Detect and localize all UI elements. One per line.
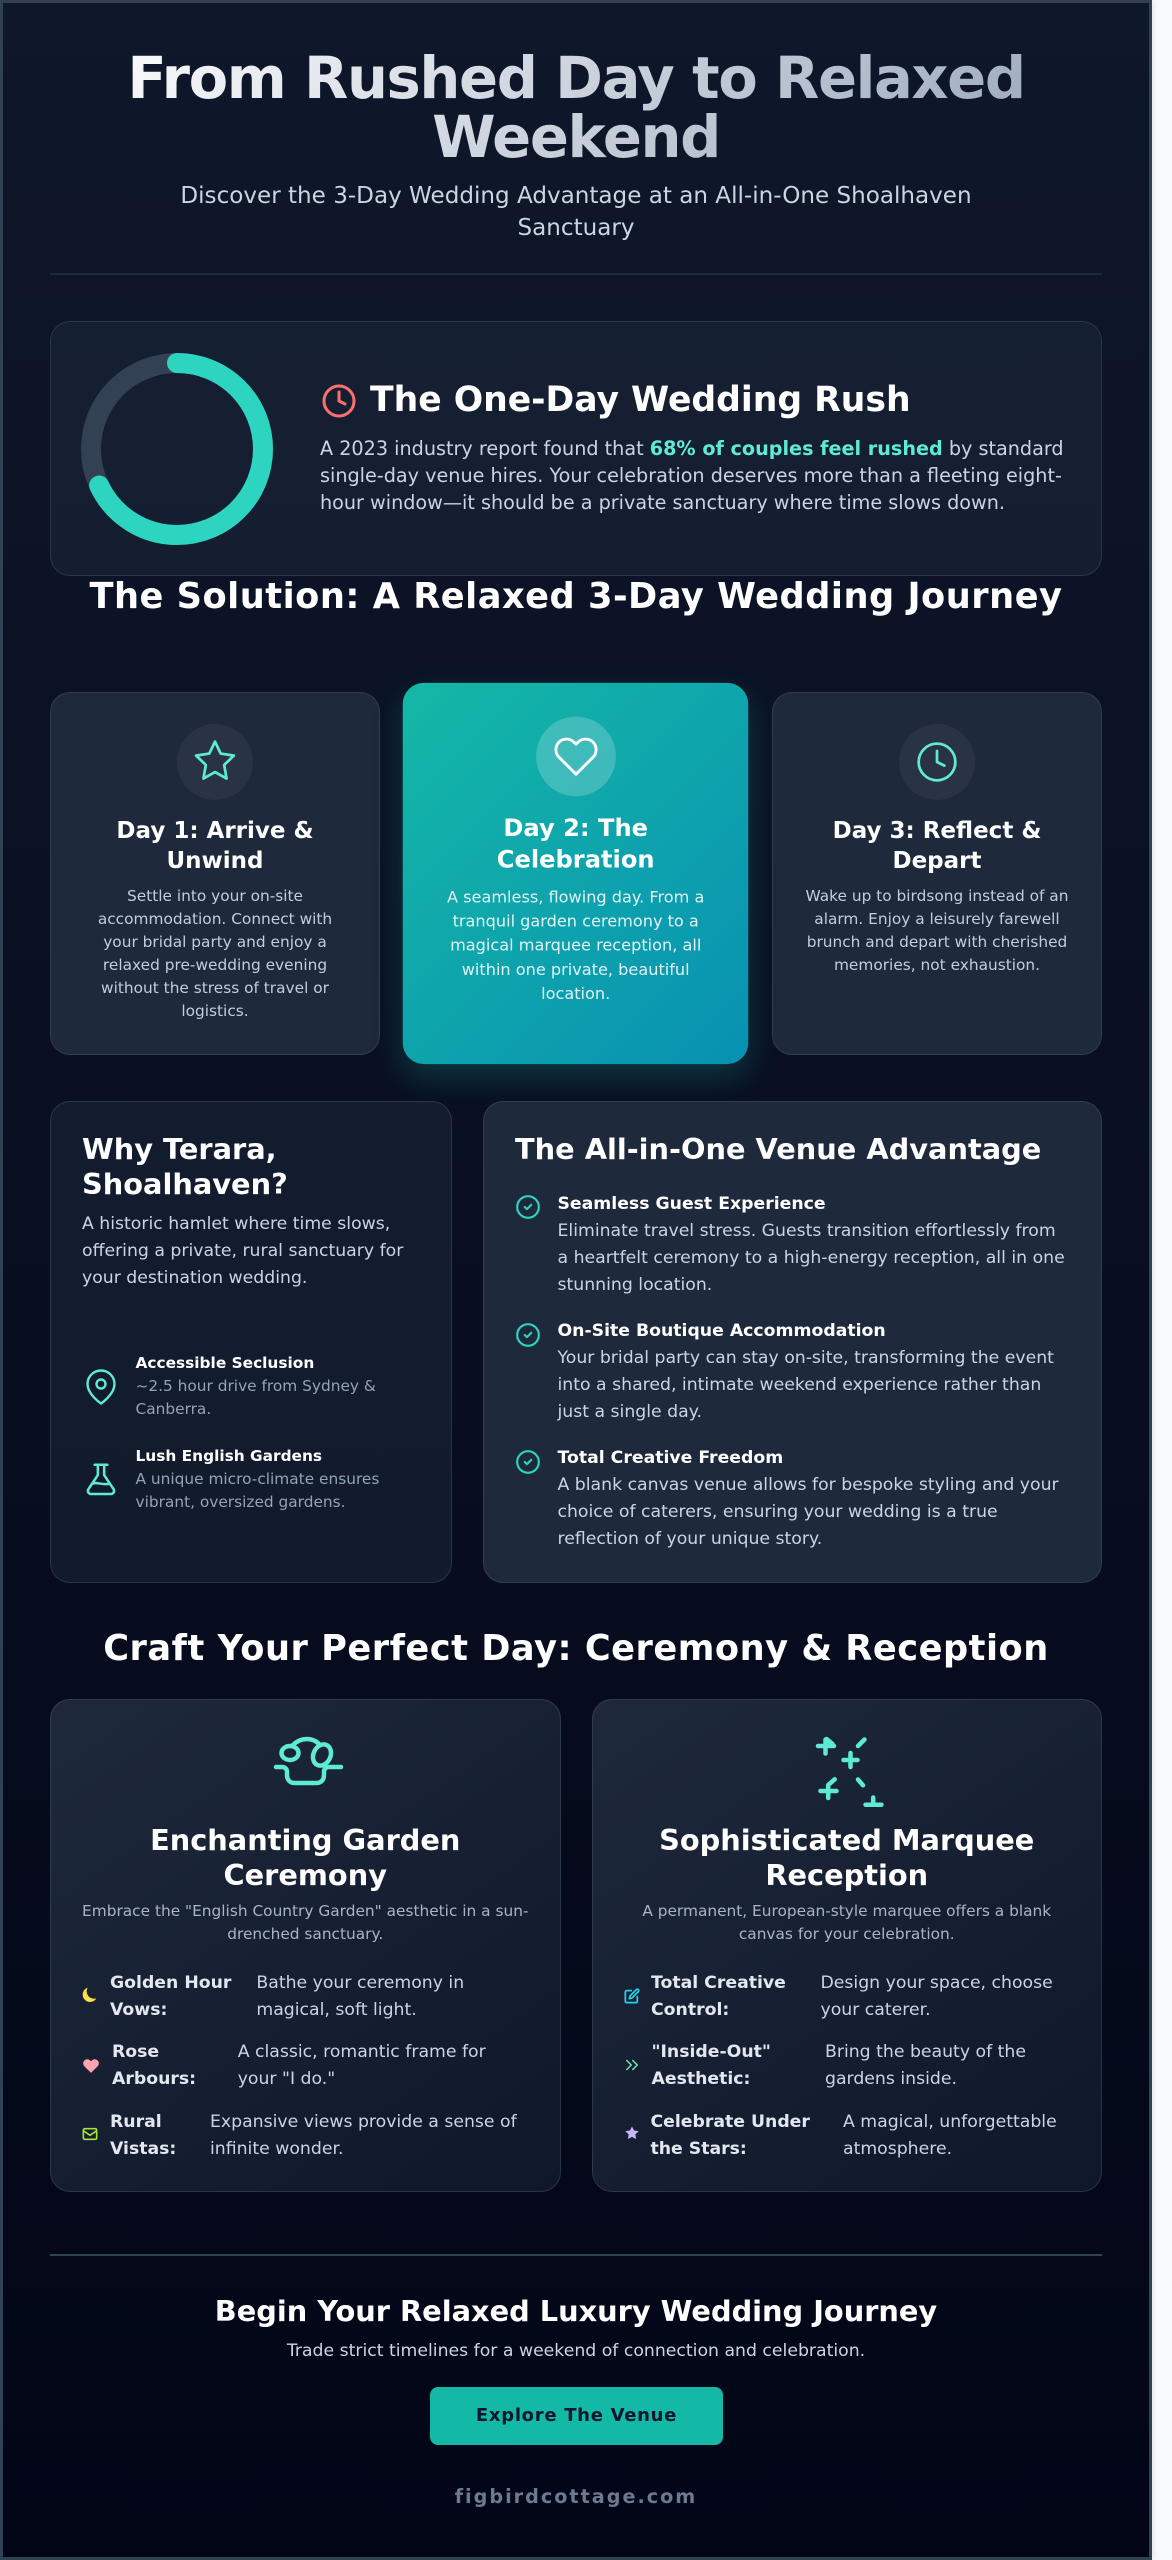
item: total creative freedom: A blank canvas venue allows for bespoke styling and your	[558, 1475, 1059, 1495]
text: day 3: memories, not exhaustion.	[834, 956, 1040, 974]
panel: garden ceremony: your "I do."	[238, 2069, 335, 2089]
title: Weekend	[432, 104, 720, 170]
heading: day 1	[116, 818, 314, 874]
heading: sophisticated marquee reception: Sophisticated Marquee	[659, 1822, 1034, 1856]
text: day 1: relaxed pre-wedding evening	[103, 956, 327, 974]
panel: garden ceremony: Golden Hour	[110, 1973, 231, 1993]
text: day 1	[98, 886, 332, 1020]
text: day 2: A seamless, flowing day. From a	[447, 887, 705, 906]
panel: marquee reception	[592, 1699, 1102, 2192]
item: seamless guest experience: stunning location.	[558, 1275, 712, 1295]
icon: clock	[899, 724, 975, 800]
text: why terara intro: offering a private, rural sanctuary for	[82, 1240, 403, 1260]
text: day 2: tranquil garden ceremony to a	[453, 911, 699, 930]
text: day 3: Wake up to birdsong instead of an	[806, 886, 1068, 904]
icon: moon	[82, 1988, 96, 2002]
text: day 2	[447, 887, 705, 1003]
panel: garden ceremony: infinite wonder.	[210, 2139, 343, 2159]
item: lush english gardens	[136, 1446, 379, 1510]
item: total creative freedom: reflection of your unique story.	[558, 1529, 822, 1549]
subtitle: Sanctuary	[518, 214, 634, 240]
item: on-site boutique accommodation	[557, 1321, 1054, 1422]
icon: check 2	[516, 1323, 540, 1347]
text: rush statistic: A 2023 industry report found that 68% of couples feel rushed by standard	[320, 437, 1064, 460]
item: lush english gardens: vibrant, oversized gardens.	[136, 1492, 346, 1510]
item: rose arbours	[112, 2042, 486, 2089]
heading: venue advantage: The All-in-One Venue Advantage	[515, 1132, 1041, 1166]
text: day 1: without the stress of travel or	[101, 979, 329, 997]
panel: day 3	[772, 692, 1102, 1055]
panel: marquee reception: Aesthetic:	[652, 2069, 750, 2089]
item: accessible seclusion: ~2.5 hour drive from Sydney &	[136, 1376, 376, 1394]
item: seamless guest experience: Seamless Guest Experience	[558, 1194, 826, 1214]
item: celebrate under the stars	[650, 2112, 1057, 2159]
text: marquee intro	[642, 1902, 1051, 1942]
icon: sparkles	[816, 1736, 884, 1807]
icon: edit	[624, 1988, 640, 2004]
text: day 1: your bridal party and enjoy a	[103, 933, 327, 951]
heading: craft your perfect day: Craft Your Perfect Day: Ceremony & Reception	[103, 1628, 1049, 1669]
item: total creative control	[651, 1973, 1053, 2020]
text: day 3: brunch and depart with cherished	[807, 933, 1067, 951]
text: day 1: Settle into your on-site	[127, 886, 303, 904]
heading: why terara	[82, 1132, 288, 1200]
subtitle	[180, 183, 972, 240]
text: day 3: alarm. Enjoy a leisurely farewell	[814, 910, 1060, 928]
footer heading: Begin Your Relaxed Luxury Wedding Journey	[215, 2294, 937, 2328]
icon: check 1	[516, 1195, 540, 1219]
text: why terara intro: A historic hamlet where time slows,	[82, 1214, 390, 1234]
text: day 1: logistics.	[181, 1002, 249, 1020]
panel: garden ceremony: Expansive views provide a sense of	[210, 2112, 517, 2132]
heading: day 1: Unwind	[166, 848, 264, 874]
icon: mail	[82, 2128, 98, 2140]
text: marquee intro: A permanent, European-style marquee offers a blank	[642, 1902, 1051, 1920]
item: total creative freedom: Total Creative Freedom	[558, 1448, 783, 1468]
item: total creative freedom: choice of caterers, ensuring your wedding is a true	[558, 1502, 998, 1522]
subtitle: Discover the 3-Day Wedding Advantage at an All-in-One Shoalhaven	[180, 183, 972, 209]
heading: why terara: Why Terara,	[82, 1132, 277, 1166]
button	[430, 2387, 723, 2445]
icon: check 3	[516, 1450, 540, 1474]
item: accessible seclusion	[136, 1354, 376, 1418]
heading: day 2: Celebration	[497, 846, 655, 873]
icon: garden sofa	[274, 1736, 344, 1786]
panel: marquee reception: "Inside-Out"	[652, 2042, 771, 2062]
panel: marquee reception: the Stars:	[650, 2139, 747, 2159]
item: lush english gardens: A unique micro-climate ensures	[136, 1470, 379, 1488]
panel: marquee reception: Design your space, choose	[820, 1973, 1053, 1993]
item: on-site boutique accommodation: just a single day.	[558, 1402, 702, 1422]
item: seamless guest experience: a heartfelt ceremony to a high-energy reception, all in one	[558, 1248, 1065, 1268]
panel: all-in-one venue advantage	[483, 1101, 1102, 1583]
item: on-site boutique accommodation: into a shared, intimate weekend experience rather than	[558, 1375, 1041, 1395]
text: why terara intro: your destination wedding.	[82, 1268, 307, 1288]
text: marquee intro: canvas for your celebration.	[739, 1924, 955, 1942]
item: on-site boutique accommodation: Your bridal party can stay on-site, transforming the event	[558, 1348, 1054, 1368]
heading: day 2	[497, 814, 655, 873]
heading: day 3: Day 3: Reflect &	[833, 818, 1041, 844]
item: rural vistas	[110, 2112, 518, 2159]
heading: day 3	[833, 818, 1041, 874]
heading: day 2: Day 2: The	[504, 814, 648, 842]
panel: garden ceremony: Rose	[112, 2042, 159, 2062]
heading: day 1: Day 1: Arrive &	[116, 818, 314, 844]
icon: star	[625, 2126, 639, 2139]
title	[50, 50, 1102, 167]
text: rush statistic: single-day venue hires. Your celebration deserves more than a fleeting eight-	[320, 464, 1062, 487]
panel: garden ceremony: Rural	[110, 2112, 162, 2132]
panel: marquee reception: Celebrate Under	[650, 2112, 810, 2132]
panel: the one-day wedding rush	[50, 321, 1102, 576]
panel: why terara	[50, 1101, 452, 1583]
panel: marquee reception: Control:	[651, 2000, 729, 2020]
panel: garden ceremony	[50, 1699, 560, 2192]
panel: garden ceremony: Bathe your ceremony in	[256, 1973, 464, 1993]
panel: marquee reception: A magical, unforgettable	[843, 2112, 1057, 2132]
heading: enchanting garden ceremony: Enchanting Garden	[150, 1822, 460, 1856]
item: total creative freedom	[558, 1448, 1059, 1549]
text: why terara intro	[82, 1214, 404, 1288]
text: day 1: accommodation. Connect with	[98, 910, 332, 928]
title: From Rushed Day to Relaxed	[127, 45, 1025, 112]
heading: sophisticated marquee reception: Reception	[765, 1858, 928, 1892]
heading: why terara: Shoalhaven?	[82, 1166, 288, 1200]
text: rush statistic: hour window—it should be a private sanctuary where time slows down.	[320, 491, 1005, 514]
item: inside-out aesthetic	[652, 2042, 1026, 2089]
panel: marquee reception: gardens inside.	[825, 2069, 957, 2089]
text: garden intro: drenched sanctuary.	[227, 1924, 383, 1942]
icon: clock	[322, 384, 356, 418]
panel: garden ceremony: Vows:	[110, 2000, 167, 2020]
text: garden intro	[82, 1902, 528, 1942]
panel: garden ceremony: magical, soft light.	[256, 2000, 417, 2020]
item: seamless guest experience: Eliminate travel stress. Guests transition effortlessly from	[558, 1221, 1056, 1241]
website url: figbirdcottage.com	[455, 2485, 697, 2508]
icon: heart	[83, 2059, 99, 2073]
icon: chevrons	[626, 2060, 638, 2070]
item: accessible seclusion: Canberra.	[136, 1400, 211, 1418]
text: day 2: location.	[541, 984, 611, 1003]
donut chart: 68 percent	[81, 353, 273, 545]
button: Explore The Venue	[476, 2405, 677, 2426]
panel: garden ceremony: Arbours:	[112, 2069, 196, 2089]
text: day 2: magical marquee reception, all	[450, 935, 702, 954]
panel: day 2 highlighted	[403, 682, 749, 1064]
panel: marquee reception: Total Creative	[651, 1973, 786, 1993]
icon: flask	[86, 1464, 116, 1496]
panel: garden ceremony: A classic, romantic frame for	[238, 2042, 486, 2062]
heading: the solution: The Solution: A Relaxed 3-Day Wedding Journey	[90, 576, 1062, 617]
text: day 2: within one private, beautiful	[462, 959, 690, 978]
item: accessible seclusion: Accessible Seclusion	[136, 1354, 314, 1372]
icon: map pin	[86, 1369, 116, 1405]
icon: star	[177, 724, 253, 800]
heading: day 3: Depart	[892, 848, 982, 874]
item: golden hour vows	[110, 1973, 464, 2020]
item: lush english gardens: Lush English Gardens	[136, 1446, 322, 1464]
text: day 3	[806, 886, 1068, 974]
panel: marquee reception: atmosphere.	[843, 2139, 952, 2159]
item: on-site boutique accommodation: On-Site Boutique Accommodation	[558, 1321, 886, 1341]
heading: the one-day wedding rush: The One-Day Wedding Rush	[370, 380, 911, 420]
panel: garden ceremony: Vistas:	[110, 2139, 176, 2159]
item: seamless guest experience	[558, 1194, 1065, 1295]
footer text: Trade strict timelines for a weekend of connection and celebration.	[287, 2341, 865, 2361]
panel: marquee reception: your caterer.	[820, 2000, 931, 2020]
heading: enchanting garden ceremony	[150, 1822, 460, 1892]
panel: marquee reception: Bring the beauty of the	[825, 2042, 1026, 2062]
panel: day 1	[50, 692, 380, 1055]
text: garden intro: Embrace the "English Country Garden" aesthetic in a sun-	[82, 1902, 528, 1920]
heading: sophisticated marquee reception	[659, 1822, 1034, 1892]
heading: enchanting garden ceremony: Ceremony	[224, 1858, 387, 1892]
text: rush statistic	[320, 437, 1064, 514]
icon: heart	[536, 716, 616, 796]
